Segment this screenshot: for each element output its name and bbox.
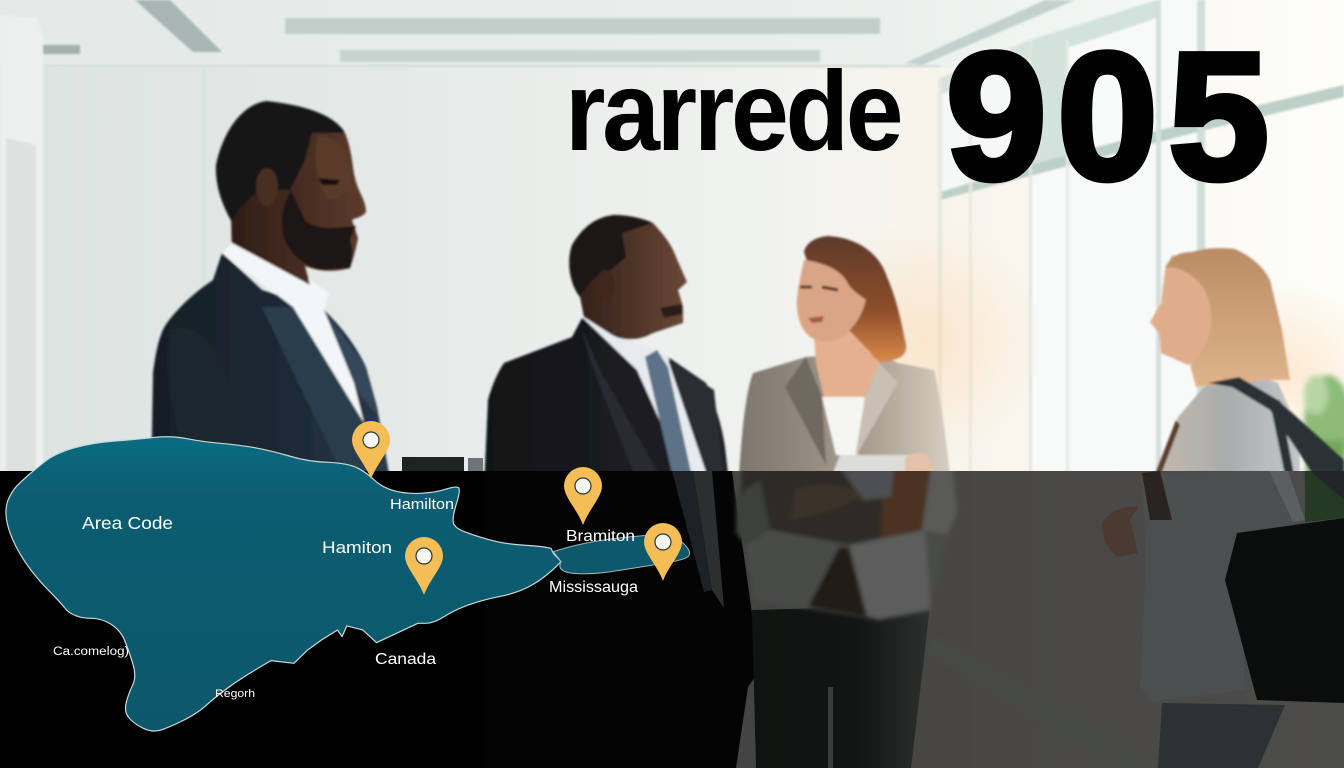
- face: [1149, 254, 1213, 366]
- top: [822, 397, 865, 455]
- face: [797, 260, 866, 342]
- map: eastern landmass: [553, 535, 690, 574]
- icon: map pin Brampton: [564, 467, 602, 525]
- tablet: [832, 454, 909, 471]
- bag straps: [1208, 376, 1344, 471]
- person: man on the left: [151, 101, 392, 490]
- title number 905: 905: [946, 16, 1280, 218]
- icon: map pin Hamilton south: [405, 537, 443, 595]
- jacket: [151, 253, 392, 490]
- label: Regorh: Regorh: [215, 688, 255, 700]
- lower figure: woman with tablet: [736, 460, 957, 768]
- dark band overlay: [0, 471, 1344, 768]
- ear: [256, 168, 278, 206]
- icon: map pin Mississauga: [644, 523, 682, 581]
- plant behind woman: [1304, 375, 1344, 480]
- icon: map pin Hamilton north: [352, 421, 390, 479]
- lower figure: man in the centre: [484, 471, 760, 768]
- neck: [814, 320, 879, 397]
- jacket: [736, 460, 957, 620]
- map: Area Code region: [6, 437, 690, 731]
- map labels: [53, 496, 638, 700]
- floor line: [925, 637, 1154, 768]
- person: man in the centre: [484, 215, 730, 490]
- trousers: [752, 605, 930, 768]
- hair: [216, 101, 345, 222]
- tie: [644, 349, 692, 471]
- face: [580, 223, 687, 339]
- lapel: [262, 306, 360, 468]
- label: Canada: Canada: [375, 651, 436, 668]
- person: woman with shoulder bag: [1149, 248, 1344, 490]
- hair back: [804, 236, 906, 362]
- hair: [569, 215, 653, 297]
- hair: [1165, 248, 1290, 387]
- label: Bramiton: Bramiton: [566, 528, 635, 545]
- label: Mississauga: Mississauga: [549, 579, 638, 596]
- neck and face: [230, 125, 366, 285]
- bag: [1225, 518, 1344, 703]
- shirt: [222, 243, 364, 423]
- person: woman with tablet: [738, 236, 952, 490]
- title word: rarrede: [565, 49, 904, 175]
- lapels: [785, 357, 826, 465]
- label: Area Code: Area Code: [82, 513, 173, 533]
- lapel: [584, 335, 657, 471]
- label: Ca.comelog: Ca.comelog): [53, 646, 129, 658]
- label: Hamilton top: Hamilton: [390, 496, 454, 513]
- shirt: [580, 316, 708, 471]
- label: Hamiton: Hamiton: [322, 539, 392, 557]
- beard: [282, 190, 356, 270]
- lower figure: woman with shoulder bag: [1102, 471, 1344, 768]
